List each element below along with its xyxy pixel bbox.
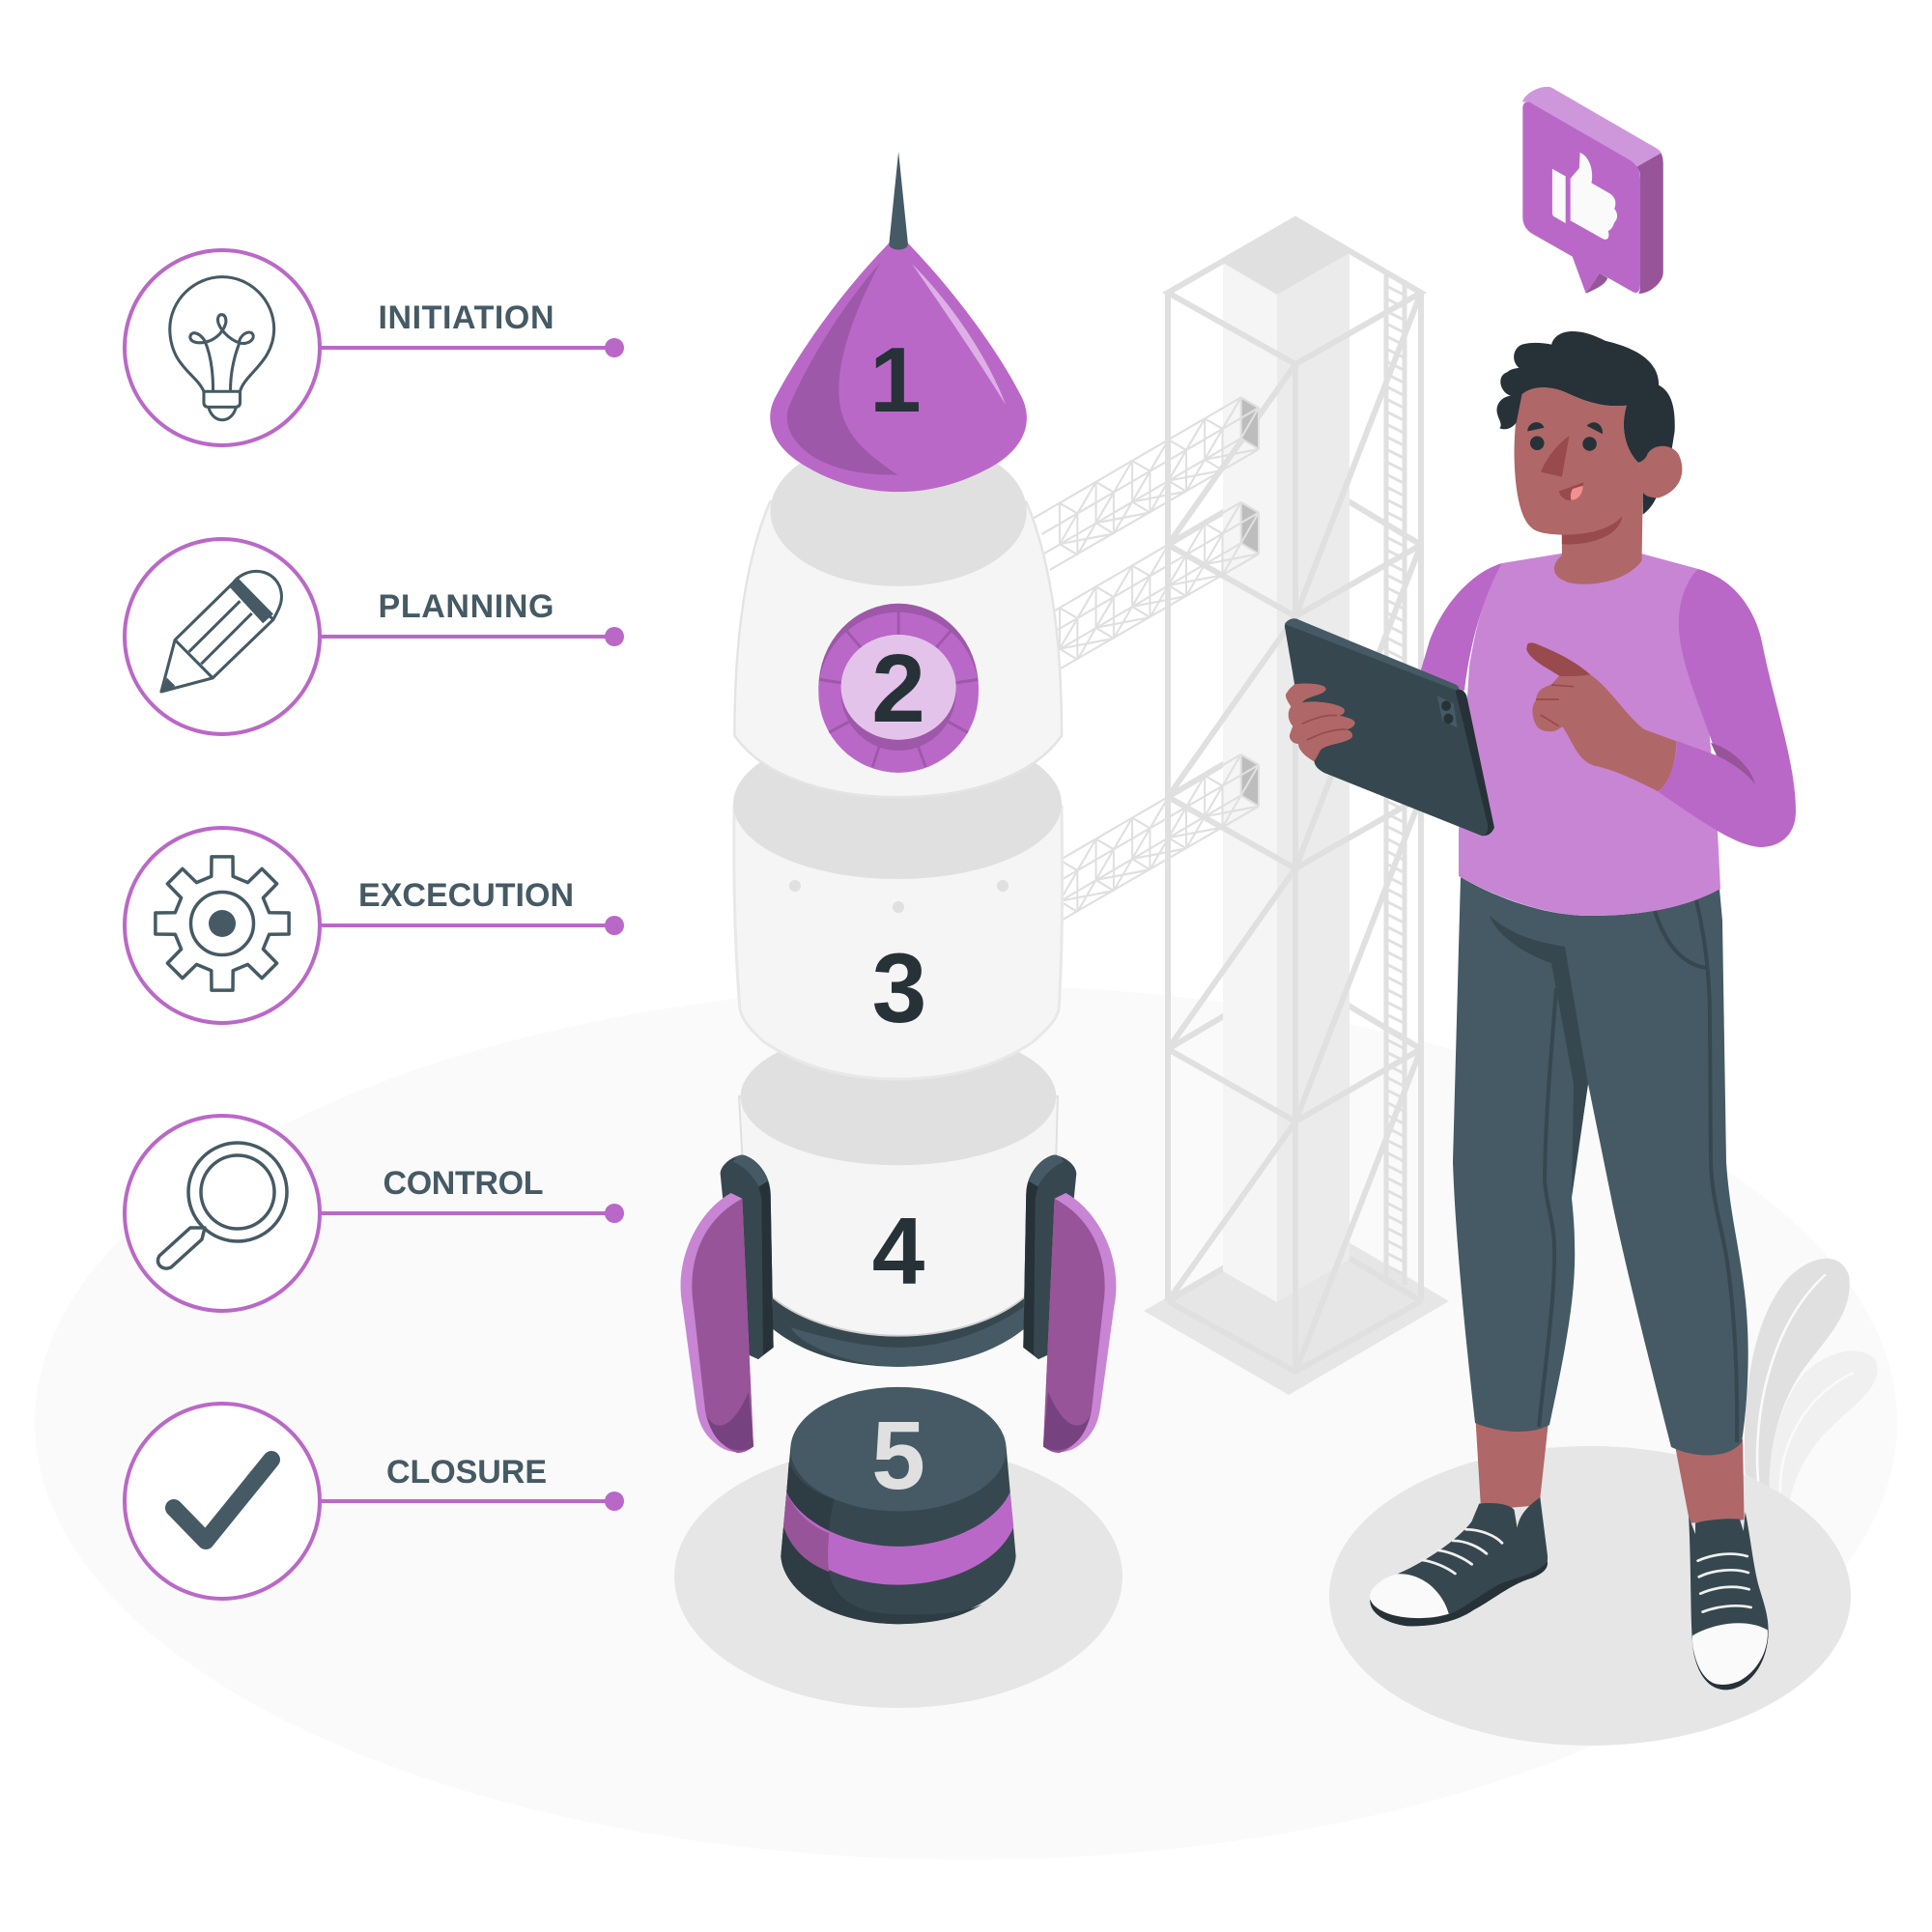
step 3: execution bbox=[125, 828, 624, 1023]
number 3: 3 bbox=[872, 933, 926, 1043]
rocket stage 3 bbox=[733, 728, 1063, 1079]
rocket bbox=[681, 152, 1116, 1624]
engine base bbox=[781, 1387, 1016, 1624]
number 2: 2 bbox=[871, 635, 925, 743]
connector 2 bbox=[320, 635, 614, 639]
rocket ground shadow bbox=[674, 1445, 1122, 1708]
right sleeve bbox=[1659, 569, 1796, 847]
rocket stage 4 bbox=[739, 1028, 1058, 1367]
number 1: 1 bbox=[869, 328, 922, 432]
dot 2 bbox=[605, 627, 624, 646]
step 5: closure bbox=[125, 1404, 624, 1599]
truss booms bbox=[1032, 397, 1259, 927]
connector 1 bbox=[320, 346, 614, 350]
number 4: 4 bbox=[872, 1198, 924, 1304]
pointing hand bbox=[1532, 674, 1677, 791]
connector 4 bbox=[320, 1211, 614, 1215]
icon: check mark bbox=[174, 1460, 271, 1541]
right fin bbox=[1023, 1155, 1116, 1453]
right shoe bbox=[1689, 1512, 1769, 1690]
label: planning: PLANNING bbox=[379, 588, 554, 625]
thumbs up speech bubble bbox=[1522, 87, 1663, 294]
background blob bbox=[35, 985, 1897, 1860]
head bbox=[1496, 331, 1682, 584]
circle 3 bbox=[125, 828, 320, 1023]
dot 3 bbox=[605, 916, 624, 935]
step 4: control bbox=[125, 1116, 624, 1311]
pants bbox=[1453, 877, 1748, 1455]
label: excecution: EXCECUTION bbox=[358, 877, 574, 914]
launch tower bbox=[1144, 219, 1449, 1395]
label: closure: CLOSURE bbox=[386, 1454, 547, 1491]
left shoe bbox=[1370, 1497, 1548, 1626]
tablet bbox=[1285, 619, 1494, 836]
pointing hand, tablet and gripping hand bbox=[1285, 618, 1677, 836]
circle 1 bbox=[125, 250, 320, 445]
left sleeve bbox=[1419, 563, 1502, 691]
circle 2 bbox=[125, 539, 320, 734]
label: initiation: INITIATION bbox=[379, 299, 554, 336]
dot 1 bbox=[605, 338, 624, 357]
plant bbox=[1745, 1259, 1877, 1500]
elbow shadow bbox=[1711, 743, 1755, 784]
dot 5 bbox=[605, 1492, 624, 1511]
pants folds bbox=[1539, 900, 1737, 1442]
connector 3 bbox=[320, 923, 614, 927]
fins and base bbox=[681, 1155, 1116, 1624]
number 5: 5 bbox=[871, 1402, 925, 1510]
circle 4 bbox=[125, 1116, 320, 1311]
dot 4 bbox=[605, 1204, 624, 1223]
icon: light bulb bbox=[170, 277, 274, 420]
icon: pencil bbox=[161, 571, 281, 692]
step 2: planning bbox=[125, 539, 624, 734]
person bbox=[1285, 331, 1796, 1690]
left fin bbox=[681, 1155, 774, 1453]
icon: magnifier bbox=[157, 1143, 287, 1268]
shoes bbox=[1370, 1497, 1769, 1690]
connector 5 bbox=[320, 1499, 614, 1503]
step 1: initiation bbox=[125, 250, 624, 445]
gripping hand bbox=[1286, 684, 1355, 761]
label: control: CONTROL bbox=[383, 1165, 543, 1202]
pants shadow bbox=[1490, 916, 1588, 1195]
shirt torso bbox=[1459, 554, 1720, 916]
person ground shadow bbox=[1329, 1446, 1851, 1746]
icon: gear bbox=[156, 857, 289, 990]
circle 5 bbox=[125, 1404, 320, 1599]
legs skin bbox=[1475, 1417, 1745, 1523]
rocket stage 2 and nose bbox=[734, 152, 1062, 797]
